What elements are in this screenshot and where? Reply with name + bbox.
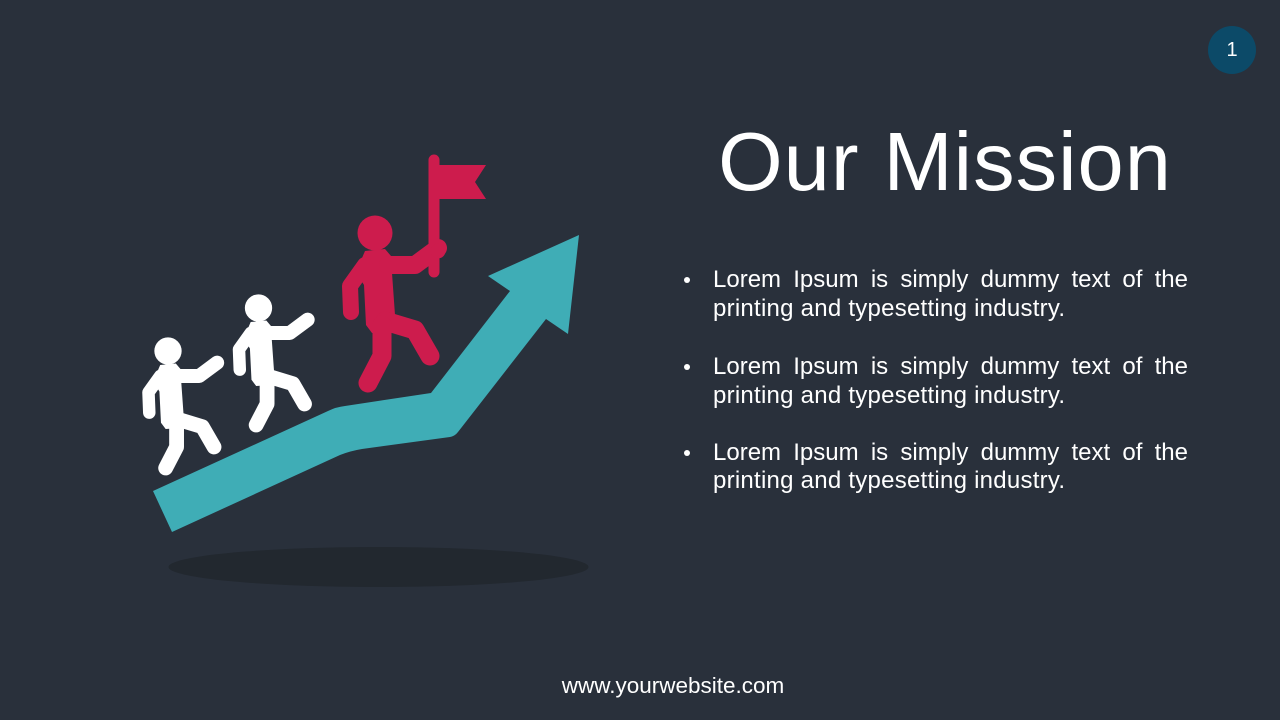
bullet 1: printing and typesetting industry. xyxy=(713,295,1065,322)
bullet 1 xyxy=(684,266,1188,322)
bullet 2: printing and typesetting industry. xyxy=(713,382,1065,409)
bullet 1: Lorem Ipsum is simply dummy text of the xyxy=(713,266,1188,293)
bullet 3: Lorem Ipsum is simply dummy text of the xyxy=(713,439,1188,466)
bullet 3 xyxy=(684,439,1188,494)
white figure, middle xyxy=(239,294,308,425)
white figure, back xyxy=(148,337,217,468)
shadow under arrow xyxy=(168,547,588,587)
bullet 3: printing and typesetting industry. xyxy=(713,467,1065,494)
page number badge: 1 xyxy=(1226,39,1238,61)
rising teal arrow xyxy=(153,235,579,532)
red leader figure with flag xyxy=(350,154,486,383)
bullet 2: Lorem Ipsum is simply dummy text of the xyxy=(713,353,1188,380)
page number badge xyxy=(1208,26,1256,74)
website footer: www.yourwebsite.com xyxy=(562,673,784,698)
title: Our Mission xyxy=(718,115,1172,208)
bullet 2 xyxy=(684,353,1188,409)
